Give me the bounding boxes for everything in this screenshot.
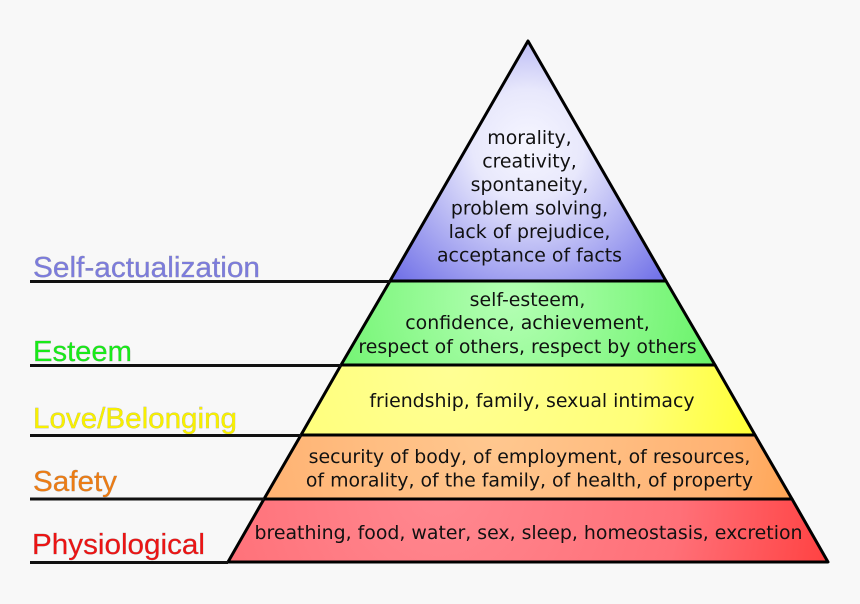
- tier: physiological band: [228, 499, 828, 562]
- label: Esteem: Esteem: [33, 336, 132, 368]
- text: esteem needs: respect of others, respect by others: [358, 336, 697, 358]
- label: Safety: Safety: [33, 466, 118, 498]
- text: self-actualization needs: morality,: [487, 127, 572, 149]
- text: esteem needs: confidence, achievement,: [405, 312, 650, 334]
- text: self-actualization needs: acceptance of facts: [437, 244, 622, 266]
- text: self-actualization needs: lack of prejudice,: [449, 221, 610, 243]
- label: Physiological: Physiological: [32, 529, 205, 561]
- tier: love/belonging band: [301, 365, 755, 435]
- text: safety needs: security of body, of employment, of resources,: [309, 446, 750, 468]
- tier: self-actualization band: [390, 41, 666, 281]
- text: physiological needs: breathing, food, water, sex, sleep, homeostasis, excretion: [255, 522, 802, 544]
- text: love/belonging needs: friendship, family, sexual intimacy: [369, 390, 695, 412]
- text: safety needs: of morality, of the family, of health, of property: [306, 470, 753, 492]
- text: esteem needs: self-esteem,: [470, 289, 585, 311]
- label: Love/Belonging: Love/Belonging: [33, 403, 237, 435]
- label: Self-actualization: Self-actualization: [33, 252, 260, 284]
- tier: esteem band: [341, 281, 715, 365]
- text: self-actualization needs: problem solving,: [451, 198, 608, 220]
- text: esteem needs: [358, 289, 697, 358]
- text: self-actualization needs: [437, 127, 622, 266]
- text: self-actualization needs: creativity,: [482, 150, 577, 172]
- tier: safety band: [264, 435, 792, 499]
- text: safety needs: [306, 446, 753, 492]
- text: self-actualization needs: spontaneity,: [471, 174, 588, 196]
